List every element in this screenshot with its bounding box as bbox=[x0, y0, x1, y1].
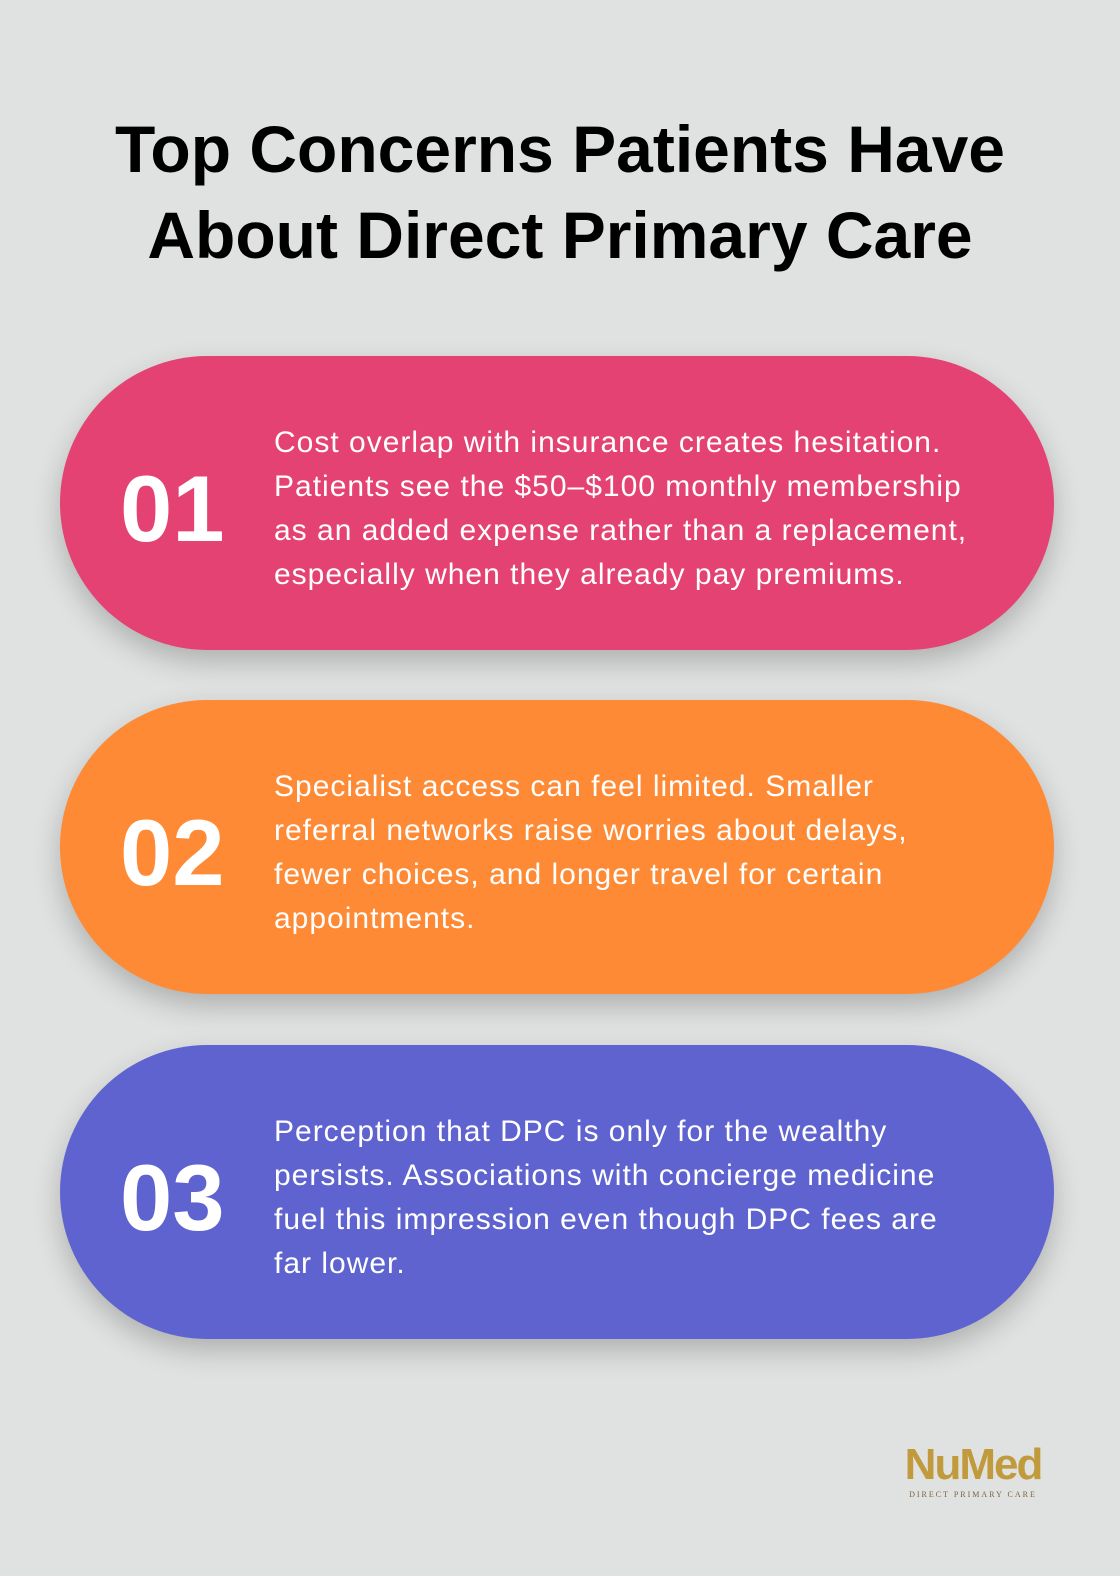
text 01: as an added expense rather than a replacement, bbox=[274, 514, 967, 547]
text 01 bbox=[274, 426, 967, 591]
number 03: 03 bbox=[120, 1145, 225, 1250]
text 02: appointments. bbox=[274, 902, 475, 935]
text 03 bbox=[274, 1115, 938, 1280]
number 01: 01 bbox=[120, 456, 225, 561]
text 03: Perception that DPC is only for the wealthy bbox=[274, 1115, 887, 1148]
panel: concern 01 bbox=[60, 356, 1054, 650]
title: About Direct Primary Care bbox=[147, 198, 973, 272]
text 03: persists. Associations with concierge medicine bbox=[274, 1159, 935, 1192]
text 03: far lower. bbox=[274, 1247, 406, 1280]
text 01: Cost overlap with insurance creates hesitation. bbox=[274, 426, 941, 459]
text 02: referral networks raise worries about delays, bbox=[274, 814, 908, 847]
text 02 bbox=[274, 770, 908, 935]
text 02: fewer choices, and longer travel for certain bbox=[274, 858, 883, 891]
text 01: especially when they already pay premiums. bbox=[274, 558, 905, 591]
text 03: fuel this impression even though DPC fees are bbox=[274, 1203, 938, 1236]
panel: concern 03 bbox=[60, 1045, 1054, 1339]
text 01: Patients see the $50–$100 monthly membership bbox=[274, 470, 962, 503]
number 02: 02 bbox=[120, 800, 225, 905]
title: Top Concerns Patients Have bbox=[115, 112, 1005, 186]
title bbox=[115, 112, 1005, 272]
text 02: Specialist access can feel limited. Smaller bbox=[274, 770, 874, 803]
logo: DIRECT PRIMARY CARE bbox=[909, 1490, 1037, 1499]
panel: concern 02 bbox=[60, 700, 1054, 994]
logo: NuMed bbox=[905, 1440, 1041, 1489]
